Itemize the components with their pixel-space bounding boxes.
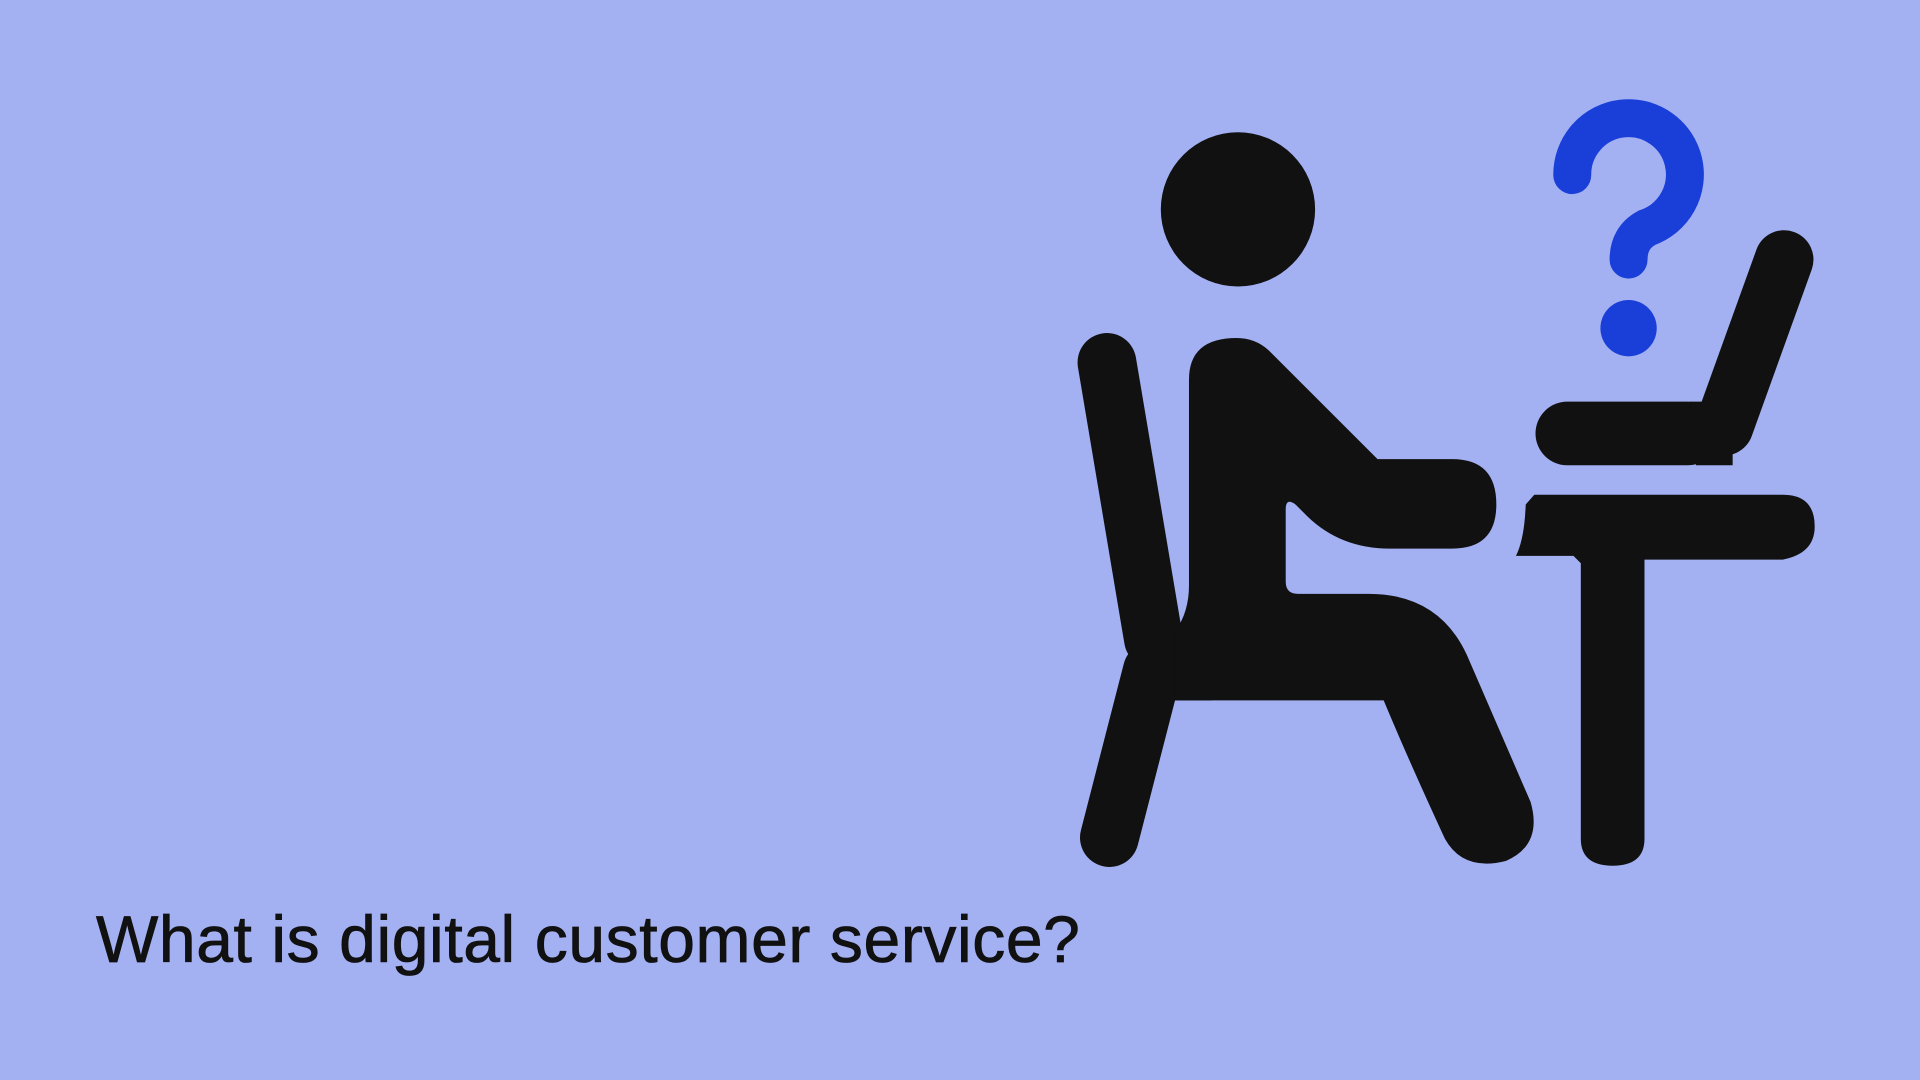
icon: chair and body bbox=[1107, 338, 1534, 864]
icon: head bbox=[1161, 132, 1315, 287]
icon: desk bbox=[1516, 495, 1815, 866]
icon: question mark bbox=[1572, 118, 1685, 356]
title: What is digital customer service? bbox=[96, 902, 1080, 976]
icon: laptop bbox=[1536, 260, 1784, 465]
